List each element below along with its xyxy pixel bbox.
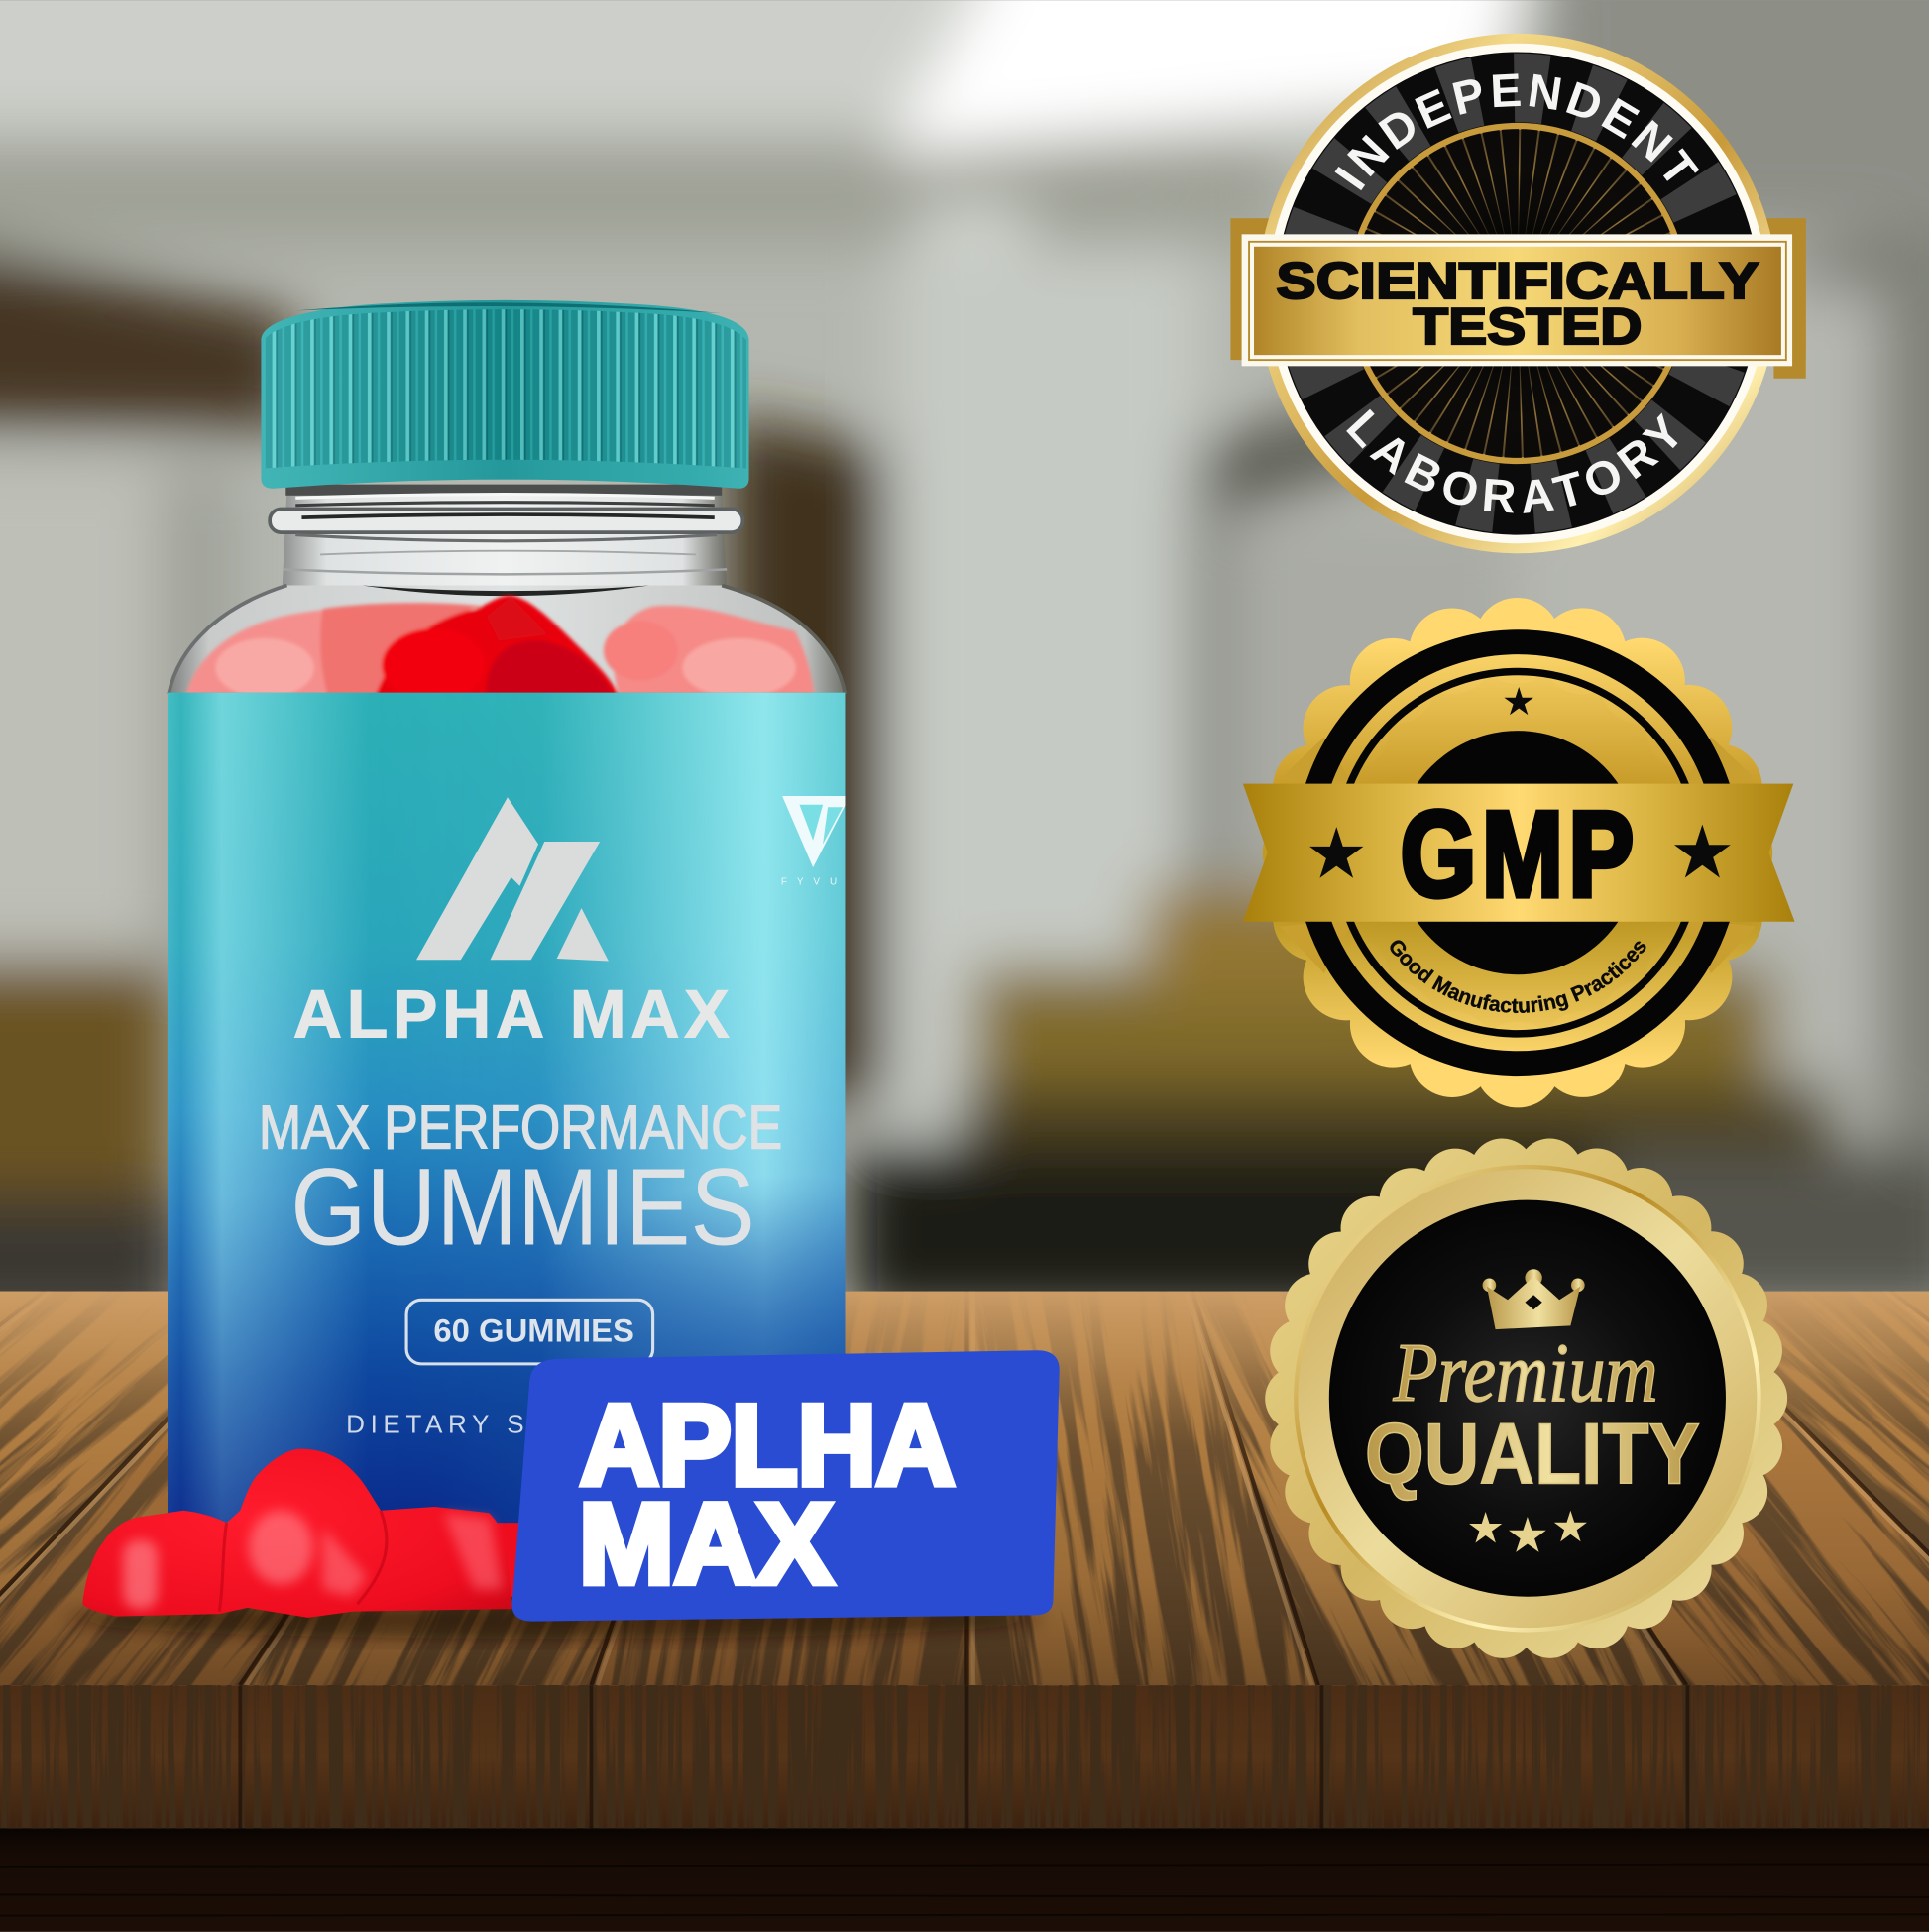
gold banner back tabs xyxy=(1230,218,1806,379)
gold banner face xyxy=(1249,242,1786,360)
bottle neck glass xyxy=(270,485,742,592)
ribbed teal cap xyxy=(261,300,749,489)
ribbon stars xyxy=(1309,825,1731,878)
quality text: QUALITY xyxy=(1365,1406,1700,1502)
brand name: ALPHA MAX xyxy=(293,977,730,1053)
gummy highlights xyxy=(123,1511,503,1609)
loose red gummies xyxy=(82,1449,523,1618)
bottle shoulder with gummies xyxy=(169,586,845,705)
badge: GMP xyxy=(1243,598,1794,1108)
bottle label panel xyxy=(168,693,863,1526)
bottle contact shadow xyxy=(67,1599,1041,1639)
dietary supplement line: DIETARY SUPPLEMENT xyxy=(346,1409,738,1438)
scalloped gold seal xyxy=(1283,1155,1770,1643)
crown icon xyxy=(1483,1269,1585,1329)
banner text: TESTED xyxy=(1413,298,1642,356)
brand mountain logo xyxy=(416,797,609,962)
arc text: independent: INDEPENDENT xyxy=(1334,73,1699,190)
gold ribbon xyxy=(1243,784,1795,922)
blurred room background xyxy=(0,0,1929,1291)
maker logo: FYVUS xyxy=(781,796,845,884)
banner text: SCIENTIFICALLY xyxy=(1276,253,1759,310)
sunburst rays xyxy=(1354,130,1681,457)
count badge xyxy=(406,1300,653,1364)
banner text xyxy=(1276,253,1759,356)
maker logo: FYVUS: FYVUS xyxy=(781,876,863,887)
GMP text: GMP xyxy=(1401,787,1640,922)
white banner border xyxy=(1242,234,1792,366)
arc text: good manufacturing practices: Good Manufacturing Practices xyxy=(1390,940,1646,1013)
outer gold ring xyxy=(1258,34,1777,553)
product bottle xyxy=(168,300,863,1526)
scalloped gold seal xyxy=(1280,630,1756,1075)
premium script: Premium xyxy=(1393,1327,1658,1420)
product line: MAX PERFORMANCE xyxy=(259,1093,782,1162)
tag text xyxy=(579,1382,955,1608)
thin gold ring xyxy=(1296,1167,1759,1630)
tag text: APLHA xyxy=(580,1382,955,1510)
badge: premium quality xyxy=(1283,1155,1770,1643)
wooden table top planks xyxy=(0,1291,1929,1685)
count badge: 60 GUMMIES xyxy=(433,1313,634,1349)
arc text: laboratory: LABORATORY xyxy=(1346,408,1677,513)
top star xyxy=(1504,687,1533,715)
black centre xyxy=(1329,1200,1726,1597)
inner gold ring xyxy=(1350,126,1685,461)
badge: scientifically tested xyxy=(1230,34,1806,553)
blue name tag xyxy=(511,1350,1060,1622)
product type: GUMMIES xyxy=(290,1146,755,1268)
table front edge xyxy=(0,1685,1929,1932)
tag text: MAX xyxy=(579,1480,833,1608)
black centre xyxy=(1396,731,1640,974)
three stars xyxy=(1469,1511,1587,1552)
segmented dark ring xyxy=(1311,87,1723,500)
black rings xyxy=(1306,642,1728,1064)
